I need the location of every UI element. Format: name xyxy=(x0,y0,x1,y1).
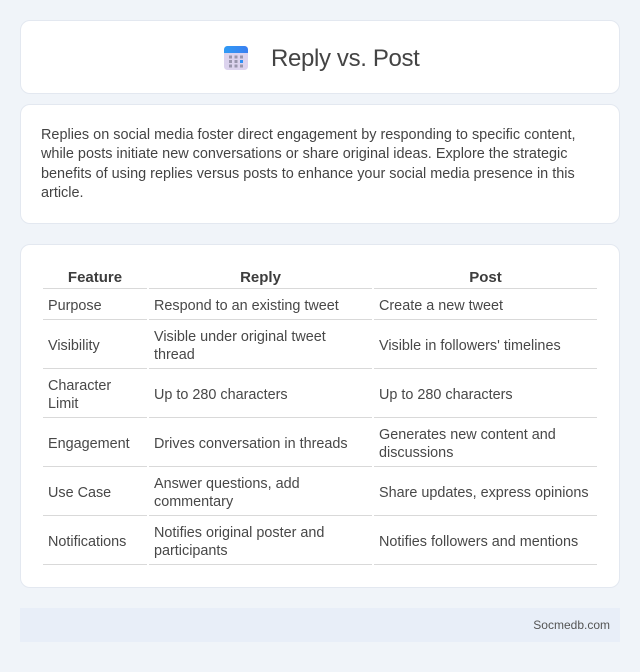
row: notifications: participants xyxy=(154,543,228,559)
row: visibility xyxy=(48,329,561,363)
footer bar xyxy=(20,608,620,642)
row: use case: Use Case xyxy=(48,485,111,501)
row: engagement: Engagement xyxy=(48,436,130,452)
intro paragraph xyxy=(41,127,576,201)
row: engagement xyxy=(48,427,556,461)
row: use case: Share updates, express opinions xyxy=(379,485,589,501)
footer text: Socmedb.com xyxy=(533,618,610,632)
intro paragraph: benefits of using replies versus posts to enhance your social media presence in this xyxy=(41,166,575,182)
row: notifications xyxy=(48,525,578,559)
row: use case: commentary xyxy=(154,494,233,510)
row: visibility: Visibility xyxy=(48,338,100,354)
row: visibility: thread xyxy=(154,347,195,363)
intro paragraph: article. xyxy=(41,185,84,201)
row: notifications: Notifies followers and mentions xyxy=(379,534,578,550)
row: notifications: Notifies original poster and xyxy=(154,525,324,541)
row: notifications: Notifications xyxy=(48,534,126,550)
panel: intro text xyxy=(20,104,620,224)
intro paragraph: while posts initiate new conversations or share original ideas. Explore the strategic xyxy=(41,146,567,162)
row: engagement: Generates new content and xyxy=(379,427,556,443)
row: use case: Answer questions, add xyxy=(154,476,300,492)
row: purpose: Respond to an existing tweet xyxy=(154,298,339,314)
table header: Reply xyxy=(240,269,281,286)
row: purpose: Create a new tweet xyxy=(379,298,503,314)
row: engagement: Drives conversation in threads xyxy=(154,436,348,452)
row: engagement: discussions xyxy=(379,445,453,461)
table header xyxy=(68,269,502,286)
row: visibility: Visible under original tweet xyxy=(154,329,326,345)
row: purpose xyxy=(48,298,503,314)
panel: comparison table xyxy=(20,244,620,588)
table header: Feature xyxy=(68,269,122,286)
intro paragraph: Replies on social media foster direct engagement by responding to specific content, xyxy=(41,127,576,143)
table header: Post xyxy=(469,269,502,286)
row: character limit: Up to 280 characters xyxy=(154,387,288,403)
row: purpose: Purpose xyxy=(48,298,102,314)
comparison table xyxy=(43,269,597,565)
row: character limit: Limit xyxy=(48,396,78,412)
row: visibility: Visible in followers' timelines xyxy=(379,338,561,354)
row: character limit xyxy=(48,378,513,412)
panel: title card xyxy=(20,20,620,94)
icon: calendar xyxy=(224,46,248,70)
row: character limit: Character xyxy=(48,378,111,394)
row: use case xyxy=(48,476,589,510)
row: character limit: Up to 280 characters xyxy=(379,387,513,403)
title: Reply vs. Post xyxy=(271,45,420,72)
